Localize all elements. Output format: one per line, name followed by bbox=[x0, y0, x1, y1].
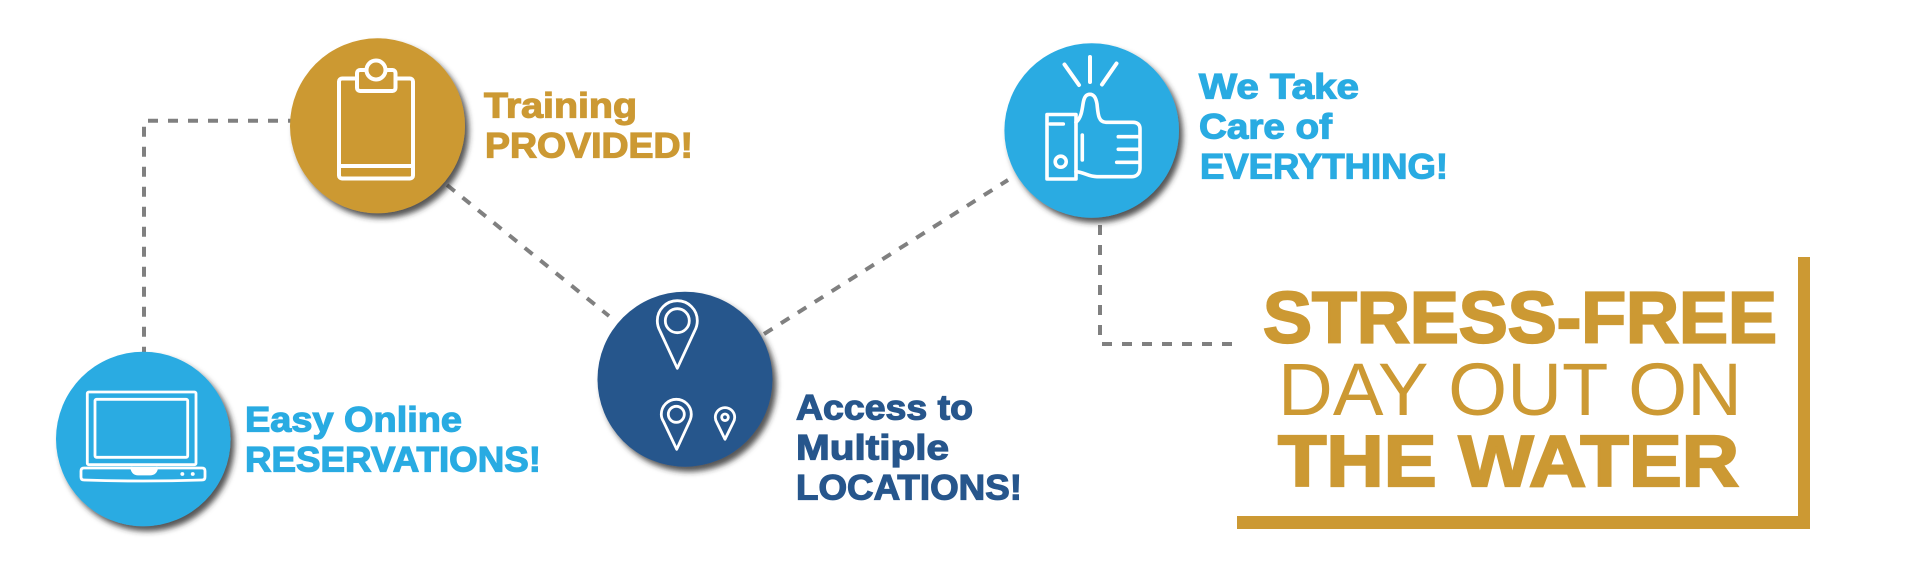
callout: stress-free day out on the water bbox=[1237, 257, 1810, 529]
label: training provided: Training bbox=[484, 86, 637, 126]
circle: light blue bbox=[1004, 43, 1179, 218]
step: we take care of everything bbox=[1004, 43, 1448, 218]
connector: map pins to thumbs up bbox=[764, 180, 1008, 334]
label: access to multiple locations: Multiple bbox=[796, 428, 949, 468]
connector: thumbs up to headline bbox=[1100, 225, 1233, 344]
label: we take care of everything bbox=[1199, 68, 1448, 186]
label: training provided: PROVIDED! bbox=[485, 126, 693, 166]
heading: day out on: DAY OUT ON bbox=[1278, 348, 1742, 431]
circle: navy bbox=[598, 292, 772, 467]
connector: laptop to clipboard bbox=[144, 121, 295, 352]
circle: light blue bbox=[56, 352, 231, 526]
label: we take care of everything: We Take bbox=[1199, 68, 1359, 106]
gold corner frame bbox=[1237, 257, 1810, 529]
step: training provided bbox=[290, 38, 693, 213]
circle: gold bbox=[290, 38, 465, 213]
heading: stress-free: STRESS-FREE bbox=[1263, 278, 1777, 358]
icon: clipboard bbox=[339, 60, 413, 178]
connector: clipboard to map pins bbox=[447, 185, 609, 316]
label: training provided bbox=[484, 86, 693, 166]
heading: the water: THE WATER bbox=[1278, 422, 1739, 502]
label: we take care of everything: Care of bbox=[1199, 108, 1332, 146]
label: access to multiple locations: LOCATIONS! bbox=[796, 468, 1022, 508]
icon: thumbs up bbox=[1047, 57, 1140, 179]
label: we take care of everything: EVERYTHING! bbox=[1200, 148, 1448, 186]
label: easy online reservations: Easy Online bbox=[245, 400, 462, 440]
label: easy online reservations bbox=[245, 400, 541, 480]
label: easy online reservations: RESERVATIONS! bbox=[245, 440, 541, 480]
label: access to multiple locations: Access to bbox=[796, 388, 973, 428]
step: easy online reservations bbox=[56, 352, 541, 526]
icon: laptop bbox=[81, 392, 205, 481]
icon: map pins bbox=[657, 301, 735, 449]
step: access to multiple locations bbox=[598, 292, 1022, 508]
label: access to multiple locations bbox=[796, 388, 1022, 508]
